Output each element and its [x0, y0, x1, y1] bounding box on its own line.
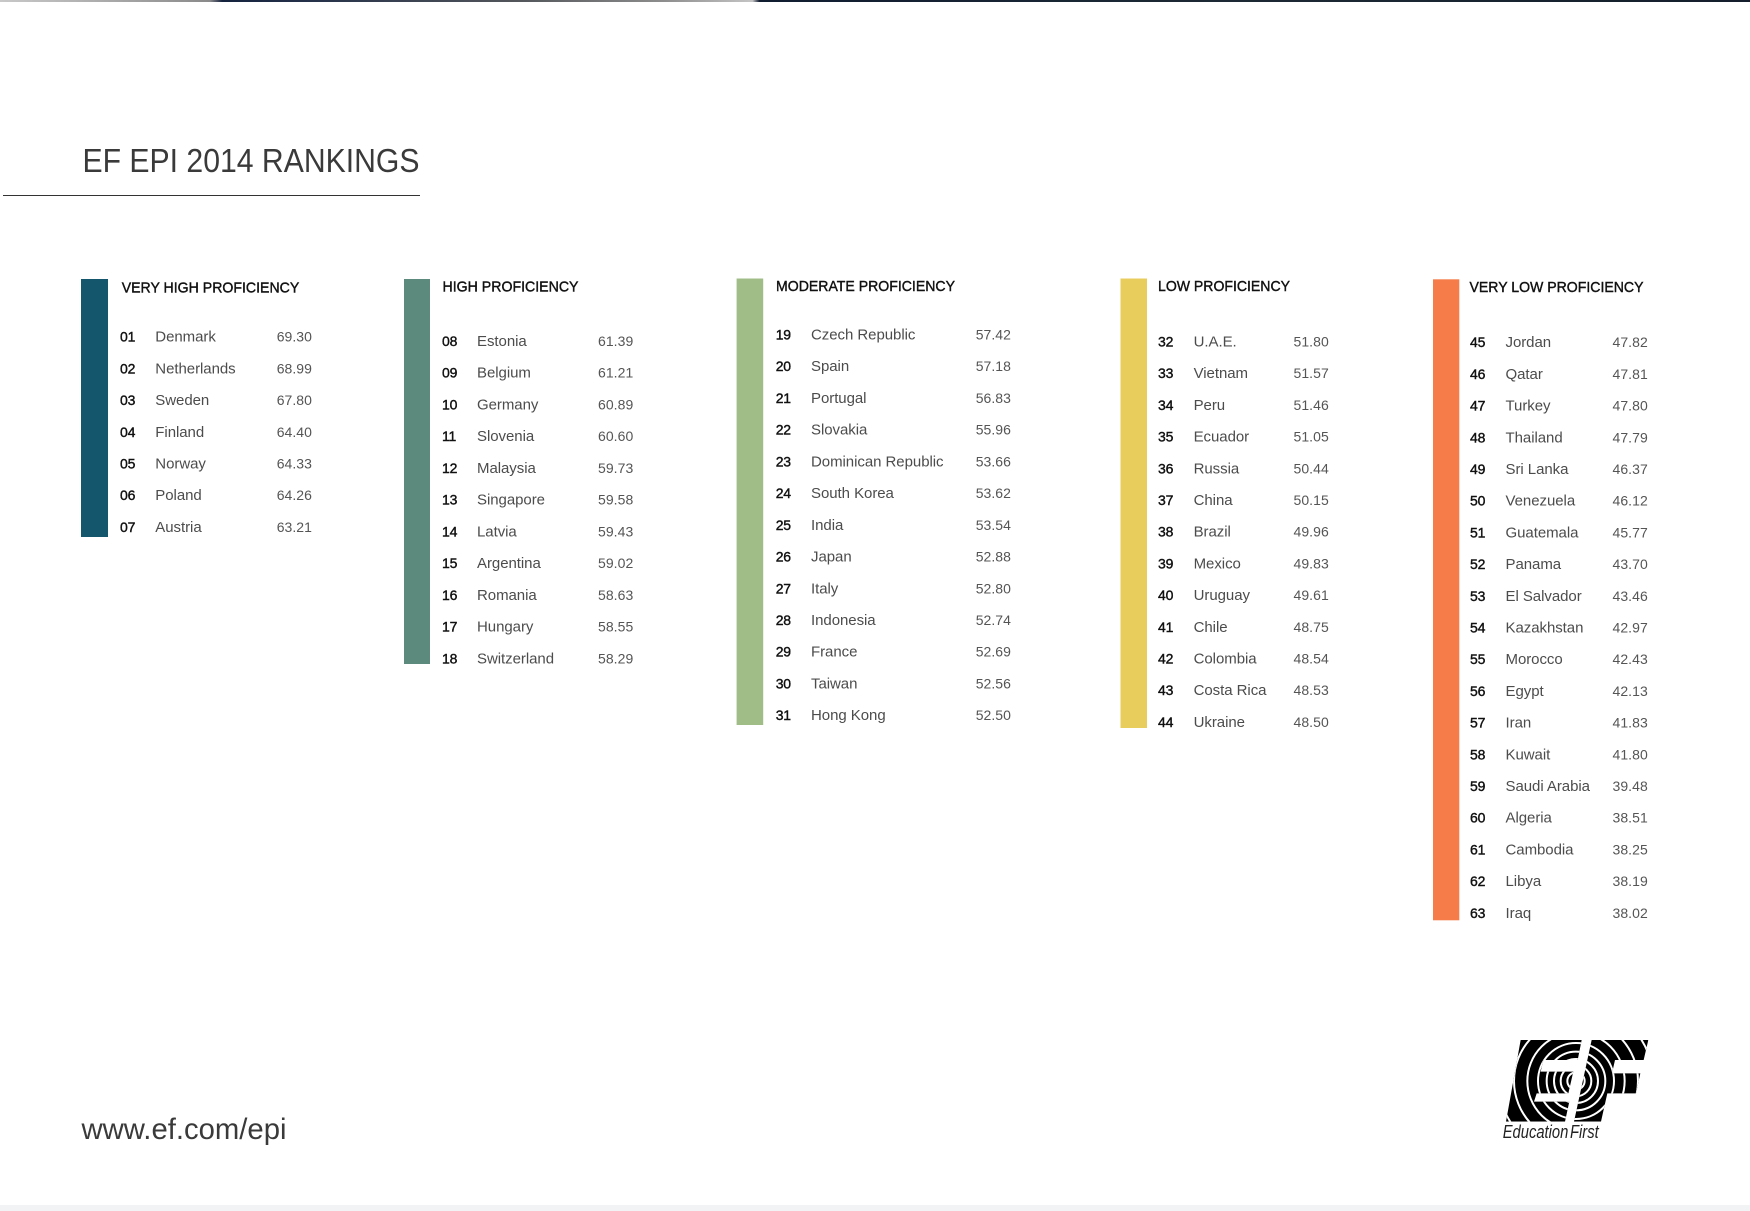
row 04: 04	[120, 424, 136, 440]
row 57: Iran	[1506, 715, 1531, 732]
row 02: 02	[120, 360, 136, 376]
row 14: Latvia	[477, 524, 517, 540]
row 49	[1470, 461, 1648, 478]
row 37	[1158, 492, 1329, 509]
row 34	[1158, 397, 1329, 414]
row 50	[1470, 493, 1648, 510]
logo: EF Education First	[1503, 1040, 1648, 1138]
row 16: 16	[442, 587, 458, 603]
row 17: 17	[442, 619, 458, 635]
row 34: 34	[1158, 397, 1174, 413]
row 18: Switzerland	[477, 650, 554, 668]
row 19: 57.42	[976, 326, 1011, 342]
row 29: France	[811, 644, 857, 661]
row 31: Hong Kong	[811, 707, 886, 724]
row 41	[1158, 619, 1329, 636]
row 16	[442, 587, 633, 604]
row 15	[442, 555, 633, 572]
heading: high proficiency: HIGH PROFICIENCY	[442, 278, 578, 296]
row 58: Kuwait	[1506, 746, 1551, 763]
row 11: 60.60	[598, 428, 633, 444]
row 59: 59	[1470, 778, 1486, 794]
row 62: 38.19	[1612, 873, 1648, 889]
colour bar: very low	[1433, 279, 1459, 920]
row 05	[120, 456, 312, 472]
row 44	[1158, 714, 1329, 731]
row 51	[1470, 524, 1648, 541]
panel: very low proficiency	[1433, 279, 1648, 922]
row 54: 54	[1470, 620, 1486, 636]
row 27: 52.80	[976, 580, 1011, 596]
row 17: 58.55	[598, 619, 633, 635]
row 32	[1158, 334, 1329, 350]
row 05: 64.33	[277, 456, 312, 472]
row 26	[776, 548, 1011, 566]
row 62: Libya	[1506, 873, 1542, 890]
row 32: 51.80	[1294, 334, 1329, 350]
row 37: 50.15	[1294, 492, 1329, 508]
row 55: Morocco	[1506, 651, 1563, 668]
row 36: 50.44	[1294, 460, 1329, 476]
row 25: 25	[776, 517, 791, 533]
row 58: 41.80	[1612, 746, 1648, 762]
row 44: 48.50	[1294, 714, 1329, 730]
row 15: 15	[442, 555, 458, 571]
row 06	[120, 487, 312, 504]
row 36	[1158, 460, 1329, 477]
row 34: Peru	[1194, 397, 1225, 414]
row 13: 59.58	[598, 492, 633, 508]
title: EF EPI 2014 RANKINGS	[82, 142, 420, 179]
row 48: 47.79	[1612, 429, 1648, 445]
row 57: 57	[1470, 715, 1486, 731]
row 18: 58.29	[598, 650, 633, 666]
row 02	[120, 360, 312, 377]
row 22: Slovakia	[811, 422, 868, 439]
row 47	[1470, 398, 1648, 415]
row 19: Czech Republic	[811, 326, 916, 344]
row 62: 62	[1470, 873, 1486, 889]
row 29	[776, 644, 1011, 661]
row 30: 52.56	[976, 675, 1011, 691]
row 13: Singapore	[477, 492, 545, 509]
row 31: 31	[776, 707, 791, 723]
row 33	[1158, 365, 1329, 382]
row 06: 64.26	[277, 487, 312, 503]
row 30: Taiwan	[811, 675, 857, 692]
row 44: Ukraine	[1194, 714, 1245, 731]
row 39	[1158, 555, 1329, 572]
row 23	[776, 453, 1011, 470]
row 55: 55	[1470, 651, 1486, 667]
website url: www.ef.com/epi	[81, 1113, 286, 1146]
row 21: 21	[776, 390, 791, 406]
row 21	[776, 390, 1011, 407]
row 56	[1470, 683, 1648, 700]
row 33: 51.57	[1294, 365, 1329, 381]
row 06: Poland	[155, 487, 202, 504]
row 08	[442, 333, 633, 350]
row 46: Qatar	[1506, 366, 1543, 383]
row 43	[1158, 682, 1329, 699]
row 26: 52.88	[976, 548, 1011, 564]
row 32: U.A.E.	[1194, 334, 1237, 350]
row 30: 30	[776, 675, 791, 691]
row 02: Netherlands	[155, 360, 236, 377]
row 20: 20	[776, 358, 791, 374]
row 55: 42.43	[1612, 651, 1648, 667]
row 31	[776, 707, 1011, 724]
row 56: 42.13	[1612, 683, 1648, 699]
row 11: 11	[442, 428, 457, 444]
row 28	[776, 612, 1011, 629]
row 60: 38.51	[1612, 810, 1648, 826]
heading: very low proficiency: VERY LOW PROFICIENCY	[1470, 279, 1644, 296]
row 46	[1470, 366, 1648, 383]
row 01: 01	[120, 329, 136, 345]
row 56: Egypt	[1506, 683, 1544, 700]
row 24: 24	[776, 485, 791, 501]
row 04: Finland	[155, 424, 204, 441]
row 08: 08	[442, 333, 458, 349]
panel: high proficiency	[404, 278, 633, 668]
row 39: Mexico	[1194, 555, 1241, 572]
panel: very high proficiency	[81, 279, 312, 537]
row 02: 68.99	[277, 360, 312, 376]
row 42: Colombia	[1194, 650, 1257, 668]
row 52: Panama	[1506, 556, 1562, 573]
row 43: 43	[1158, 682, 1174, 698]
row 38: Brazil	[1194, 524, 1231, 541]
row 35: Ecuador	[1194, 429, 1249, 446]
row 54: 42.97	[1612, 620, 1648, 636]
heading: very high proficiency: VERY HIGH PROFICIENCY	[122, 279, 299, 296]
row 21: 56.83	[976, 390, 1011, 406]
row 03: 03	[120, 392, 136, 408]
row 26: 26	[776, 548, 791, 564]
row 49: 46.37	[1612, 461, 1648, 477]
row 24: South Korea	[811, 485, 895, 502]
colour bar: very high	[81, 279, 108, 537]
row 17: Hungary	[477, 619, 534, 636]
row 11	[442, 428, 633, 445]
row 47: Turkey	[1506, 398, 1551, 415]
row 25: 53.54	[976, 517, 1011, 533]
row 40: 40	[1158, 587, 1174, 603]
row 28: 28	[776, 612, 791, 628]
row 23: 23	[776, 453, 791, 469]
row 23: Dominican Republic	[811, 453, 944, 470]
row 50: 50	[1470, 493, 1486, 509]
row 59: 39.48	[1612, 778, 1648, 794]
row 50: Venezuela	[1506, 493, 1576, 510]
row 13	[442, 492, 633, 509]
row 63	[1470, 905, 1648, 922]
row 20: 57.18	[976, 358, 1011, 374]
row 19: 19	[776, 326, 791, 342]
row 18: 18	[442, 650, 458, 666]
row 08: 61.39	[598, 333, 633, 349]
row 45: 45	[1470, 334, 1486, 350]
colour bar: high	[404, 279, 430, 664]
row 12: 12	[442, 460, 458, 476]
row 61: 61	[1470, 841, 1486, 857]
row 58	[1470, 746, 1648, 763]
row 14: 14	[442, 524, 458, 540]
row 03	[120, 392, 312, 409]
row 40	[1158, 587, 1329, 604]
row 15: Argentina	[477, 555, 541, 572]
row 45: 47.82	[1612, 334, 1648, 350]
row 12: Malaysia	[477, 460, 536, 477]
row 34: 51.46	[1294, 397, 1329, 413]
row 25: India	[811, 517, 844, 534]
row 09: 61.21	[598, 365, 633, 381]
row 37: China	[1194, 492, 1233, 509]
row 29: 29	[776, 644, 791, 660]
row 35	[1158, 429, 1329, 446]
logo wordmark: Education First	[1503, 1122, 1600, 1142]
row 04	[120, 424, 312, 441]
row 33: 33	[1158, 365, 1174, 381]
row 03: Sweden	[155, 392, 209, 409]
row 14: 59.43	[598, 524, 633, 540]
row 46: 46	[1470, 366, 1486, 382]
row 05: 05	[120, 456, 136, 472]
row 60: 60	[1470, 810, 1486, 826]
row 53: 53	[1470, 588, 1486, 604]
row 07: 63.21	[277, 519, 312, 535]
row 22	[776, 422, 1011, 439]
row 57	[1470, 715, 1648, 732]
row 61: Cambodia	[1506, 841, 1574, 858]
row 51: 45.77	[1612, 524, 1648, 540]
row 56: 56	[1470, 683, 1486, 699]
row 52: 43.70	[1612, 556, 1648, 572]
row 01: 69.30	[277, 329, 312, 345]
row 51: 51	[1470, 524, 1486, 540]
row 10: 60.89	[598, 396, 633, 412]
row 10	[442, 396, 633, 414]
row 42: 48.54	[1294, 650, 1329, 666]
row 06: 06	[120, 487, 136, 503]
row 61	[1470, 841, 1648, 858]
row 09: Belgium	[477, 365, 531, 382]
row 17	[442, 619, 633, 636]
row 38: 49.96	[1294, 524, 1329, 540]
row 27: Italy	[811, 580, 839, 597]
row 04: 64.40	[277, 424, 312, 440]
row 48	[1470, 429, 1648, 446]
row 39: 39	[1158, 555, 1174, 571]
row 07	[120, 519, 312, 536]
row 63: 38.02	[1612, 905, 1648, 921]
row 48: 48	[1470, 429, 1486, 445]
row 41: Chile	[1194, 619, 1228, 636]
row 59: Saudi Arabia	[1506, 778, 1591, 795]
row 39: 49.83	[1294, 555, 1329, 571]
row 41: 48.75	[1294, 619, 1329, 635]
row 47: 47.80	[1612, 398, 1648, 414]
row 53: El Salvador	[1506, 588, 1582, 605]
row 20: Spain	[811, 358, 849, 375]
row 58: 58	[1470, 746, 1486, 762]
row 16: Romania	[477, 587, 537, 604]
row 26: Japan	[811, 548, 852, 566]
row 35: 51.05	[1294, 429, 1329, 445]
row 47: 47	[1470, 398, 1486, 414]
row 18	[442, 650, 633, 668]
row 22: 55.96	[976, 422, 1011, 438]
row 10: Germany	[477, 396, 539, 414]
row 38	[1158, 524, 1329, 541]
colour bar: low	[1120, 278, 1147, 728]
row 60: Algeria	[1506, 810, 1553, 827]
row 19	[776, 326, 1011, 344]
row 29: 52.69	[976, 644, 1011, 660]
row 28: Indonesia	[811, 612, 876, 629]
row 11: Slovenia	[477, 428, 535, 445]
row 14	[442, 524, 633, 540]
row 36: Russia	[1194, 460, 1240, 477]
row 09: 09	[442, 365, 458, 381]
row 38: 38	[1158, 524, 1174, 540]
row 27	[776, 580, 1011, 597]
row 22: 22	[776, 422, 791, 438]
row 12	[442, 460, 633, 477]
row 32: 32	[1158, 334, 1174, 350]
row 52: 52	[1470, 556, 1486, 572]
row 62	[1470, 873, 1648, 890]
row 48: Thailand	[1506, 429, 1563, 446]
row 01: Denmark	[155, 329, 216, 346]
row 49: Sri Lanka	[1506, 461, 1569, 478]
row 45: Jordan	[1506, 334, 1551, 351]
row 45	[1470, 334, 1648, 351]
row 60	[1470, 810, 1648, 827]
row 44: 44	[1158, 714, 1174, 730]
row 57: 41.83	[1612, 715, 1648, 731]
icon: EF striped mark	[1506, 1040, 1648, 1122]
row 28: 52.74	[976, 612, 1011, 628]
row 59	[1470, 778, 1648, 795]
row 13: 13	[442, 492, 458, 508]
row 53	[1470, 588, 1648, 605]
row 54	[1470, 620, 1648, 636]
row 36: 36	[1158, 460, 1174, 476]
row 23: 53.66	[976, 453, 1011, 469]
row 42	[1158, 650, 1329, 668]
row 35: 35	[1158, 429, 1174, 445]
row 54: Kazakhstan	[1506, 620, 1583, 636]
heading: low proficiency: LOW PROFICIENCY	[1158, 278, 1290, 295]
row 61: 38.25	[1612, 841, 1648, 857]
row 42: 42	[1158, 650, 1174, 666]
row 24: 53.62	[976, 485, 1011, 501]
row 40: Uruguay	[1194, 587, 1250, 604]
row 07: 07	[120, 519, 136, 535]
row 21: Portugal	[811, 390, 866, 407]
row 07: Austria	[155, 519, 202, 536]
row 37: 37	[1158, 492, 1174, 508]
row 53: 43.46	[1612, 588, 1648, 604]
row 03: 67.80	[277, 392, 312, 408]
row 50: 46.12	[1612, 493, 1648, 509]
row 46: 47.81	[1612, 366, 1648, 382]
row 43: Costa Rica	[1194, 682, 1267, 699]
row 10: 10	[442, 396, 458, 412]
row 24	[776, 485, 1011, 502]
row 31: 52.50	[976, 707, 1011, 723]
row 33: Vietnam	[1194, 365, 1248, 382]
row 12: 59.73	[598, 460, 633, 476]
row 05: Norway	[155, 456, 206, 472]
row 25	[776, 517, 1011, 534]
row 55	[1470, 651, 1648, 668]
colour bar: moderate	[737, 278, 763, 725]
row 63: 63	[1470, 905, 1486, 921]
row 27: 27	[776, 580, 791, 596]
row 09	[442, 365, 633, 382]
row 15: 59.02	[598, 555, 633, 571]
row 52	[1470, 556, 1648, 573]
row 41: 41	[1158, 619, 1174, 635]
row 08: Estonia	[477, 333, 527, 350]
row 40: 49.61	[1294, 587, 1329, 603]
row 20	[776, 358, 1011, 375]
row 16: 58.63	[598, 587, 633, 603]
row 30	[776, 675, 1011, 692]
panel: moderate proficiency	[737, 278, 1011, 725]
row 01	[120, 329, 312, 346]
row 63: Iraq	[1506, 905, 1531, 922]
row 43: 48.53	[1294, 682, 1329, 698]
row 51: Guatemala	[1506, 524, 1579, 541]
row 49: 49	[1470, 461, 1486, 477]
panel: low proficiency	[1120, 278, 1329, 731]
heading: moderate proficiency: MODERATE PROFICIENCY	[776, 278, 955, 295]
